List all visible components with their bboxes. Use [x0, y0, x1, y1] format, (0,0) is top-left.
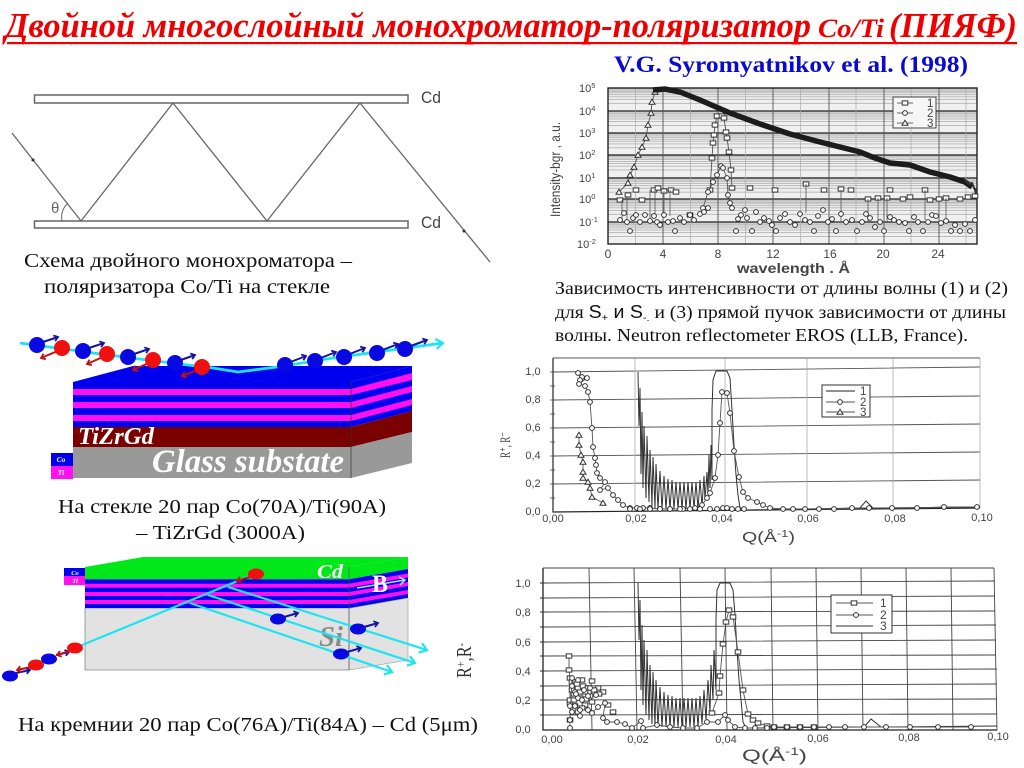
- x axis labels: 20: [876, 247, 890, 261]
- axis title y: -: [453, 643, 468, 646]
- x axis labels: 16: [823, 247, 837, 261]
- x axis labels: [541, 731, 1009, 746]
- x axis labels: 0,02: [625, 513, 647, 525]
- layer legend Co/Ti: Co: [57, 455, 66, 464]
- y axis labels: 1,0: [525, 366, 541, 378]
- y axis labels: 10: [579, 194, 591, 206]
- y axis labels: 1: [591, 171, 595, 180]
- x axis labels: [605, 247, 945, 261]
- caption: glass sample: На стекле 20 пар Co(70A)/Ti(90A): [58, 496, 386, 518]
- legend: 1: [927, 98, 933, 110]
- panel: silicon substrate multilayer diagram: [2, 557, 427, 682]
- axis title x: Q(Å: [742, 746, 772, 765]
- axis title x: ): [788, 529, 795, 546]
- y axis labels: [525, 366, 541, 518]
- layer legend Co/Ti: Ti: [58, 468, 65, 477]
- caption: intensity chart: волны. Neutron reflectometer EROS (LLB, France).: [555, 325, 968, 346]
- y axis labels: 10: [579, 106, 591, 118]
- angle theta: [51, 200, 68, 221]
- x axis labels: 0,00: [541, 734, 563, 746]
- panel: double monochromator scheme: [12, 88, 490, 262]
- y axis labels: 10: [579, 128, 591, 140]
- y axis labels: 3: [591, 126, 595, 135]
- side layers: [351, 366, 412, 478]
- chart: reflectivity lower (silicon): [452, 568, 1009, 765]
- curve 1: squares: [620, 116, 975, 222]
- y axis labels: 0: [591, 192, 595, 201]
- y axis labels: 1,0: [515, 578, 531, 590]
- y axis labels: 4: [591, 104, 595, 113]
- y axis labels: 0,4: [515, 666, 531, 678]
- caption: scheme: поляризатора Co/Ti на стекле: [44, 276, 330, 298]
- x axis labels: 12: [766, 247, 780, 261]
- title: Двойной многослойный монохроматор-поляризатор: [2, 6, 811, 45]
- chart: reflectivity upper (glass): [498, 358, 993, 546]
- neutrons: [2, 568, 378, 682]
- x axis labels: 0,02: [627, 734, 649, 746]
- axis title x: -1: [777, 529, 789, 540]
- curve 2: circles: [578, 373, 977, 509]
- legend: [831, 595, 892, 633]
- Cd label bottom: Cd: [421, 213, 441, 232]
- panel: glass substrate multilayer diagram: [20, 337, 443, 480]
- y axis labels: 10: [577, 239, 589, 251]
- legend: [893, 97, 936, 130]
- axis title y: +: [453, 661, 468, 667]
- top face: [73, 366, 412, 382]
- x axis labels: [542, 512, 993, 525]
- y axis labels: 0,4: [525, 450, 541, 462]
- y axis labels: 0,2: [515, 695, 531, 707]
- legend: 2: [860, 397, 866, 409]
- magnetic field B: [357, 571, 405, 598]
- y axis labels: 2: [591, 148, 595, 157]
- side layers: [349, 557, 408, 670]
- x axis labels: 0: [605, 247, 612, 261]
- x axis labels: 0,06: [797, 513, 819, 525]
- caption: scheme: Схема двойного монохроматора –: [24, 250, 353, 272]
- y axis labels: [577, 81, 598, 251]
- curve 1: oscillating reflectivity: [638, 371, 980, 510]
- front layers: [85, 567, 349, 670]
- legend: 3: [927, 118, 933, 130]
- angle theta: θ: [51, 200, 59, 217]
- axis title x: wavelength . Å: [736, 260, 850, 276]
- legend: [822, 385, 870, 419]
- y axis labels: 0,0: [525, 506, 541, 518]
- y axis labels: 0,2: [525, 478, 541, 490]
- chart: intensity vs wavelength: [547, 81, 977, 276]
- x axis labels: 0,00: [542, 513, 564, 525]
- x axis labels: 0,08: [898, 732, 920, 744]
- caption: scheme: [24, 250, 353, 298]
- x axis labels: 0,08: [884, 513, 906, 525]
- y axis labels: 10: [579, 150, 591, 162]
- legend: 2: [880, 608, 887, 622]
- caption: intensity chart: для S: [555, 302, 601, 322]
- y axis labels: 0,0: [515, 724, 531, 736]
- author credit: V.G. Syromyatnikov et al. (1998): [614, 52, 968, 78]
- label Cd: Cd: [317, 561, 344, 583]
- caption: glass sample: [58, 496, 386, 544]
- caption: intensity chart: +: [602, 313, 608, 324]
- curve 3: direct beam: [619, 89, 977, 198]
- x axis labels: 4: [660, 247, 667, 261]
- caption: intensity chart: и (3) прямой пучок зависимости от длины: [650, 302, 1006, 323]
- legend: 2: [927, 108, 933, 120]
- layer legend Co/Ti: [64, 568, 85, 585]
- label Si: Si: [319, 622, 343, 653]
- x axis labels: 8: [715, 247, 722, 261]
- y axis labels: 10: [579, 83, 591, 95]
- axis title x: Q(Å: [742, 529, 769, 546]
- curve 1: squares: [569, 610, 814, 727]
- caption: silicon sample: На кремнии 20 пар Co(76A)/Ti(84A) – Cd (5μm): [18, 714, 478, 736]
- x axis labels: 0,10: [971, 512, 993, 524]
- x axis labels: 0,10: [987, 731, 1009, 743]
- caption: intensity chart: Зависимость интенсивности от длины волны (1) и (2): [555, 278, 1008, 299]
- axis title x: -1: [785, 746, 799, 758]
- front layers: [73, 382, 351, 478]
- x axis labels: 24: [931, 247, 945, 261]
- x axis labels: 0,04: [715, 734, 737, 746]
- label Glass substate: Glass substate: [152, 444, 344, 480]
- layer legend Co/Ti: [51, 453, 73, 479]
- x axis labels: 0,06: [807, 733, 829, 745]
- y axis labels: 0,6: [525, 422, 541, 434]
- y axis labels: -1: [591, 215, 598, 224]
- y axis labels: 10: [579, 217, 591, 229]
- curve 3: oscillating reflectivity: [638, 583, 997, 728]
- axis title y: R⁺, R⁻: [498, 432, 514, 458]
- y axis labels: 0,8: [515, 607, 531, 619]
- axis title y: Intensity-bgr , a.u.: [547, 122, 563, 217]
- y axis labels: [515, 578, 531, 736]
- y axis labels: 10: [579, 173, 591, 185]
- caption: intensity chart: -.: [643, 313, 650, 324]
- curve 3: triangles: [579, 435, 603, 503]
- incident and reflected beams: [75, 573, 427, 672]
- axis title y: R: [452, 664, 476, 678]
- caption: intensity chart: и S: [608, 302, 643, 322]
- magnetic field B: B: [372, 571, 388, 598]
- y axis labels: 0,6: [515, 637, 531, 649]
- x axis labels: 0,04: [711, 513, 733, 525]
- curve 2: circles: [570, 678, 971, 728]
- axis title y: ,R: [452, 646, 476, 661]
- legend: 3: [880, 619, 887, 633]
- title: Co/Ti: [818, 14, 885, 43]
- legend: 3: [860, 407, 866, 419]
- neutron beam zigzag: [12, 103, 490, 262]
- label TiZrGd: TiZrGd: [78, 424, 155, 450]
- caption: glass sample: – TiZrGd (3000A): [135, 522, 305, 544]
- layer legend Co/Ti: Co: [71, 570, 80, 577]
- y axis labels: -2: [589, 237, 596, 246]
- axis title x: ): [799, 746, 807, 765]
- legend: 1: [860, 386, 866, 398]
- spin-down neutrons: [41, 340, 210, 376]
- y axis labels: 0,8: [525, 394, 541, 406]
- y axis labels: 5: [591, 81, 595, 90]
- curve 2: circles: [620, 166, 975, 231]
- legend: 1: [880, 596, 887, 610]
- Cd label top: Cd: [421, 88, 441, 107]
- title: (ПИЯФ): [889, 6, 1017, 45]
- layer legend Co/Ti: Ti: [72, 578, 78, 585]
- neutron beam: [20, 343, 443, 372]
- top face: [85, 557, 408, 567]
- spin-up neutrons: [29, 337, 427, 373]
- caption: intensity chart: [555, 278, 1008, 346]
